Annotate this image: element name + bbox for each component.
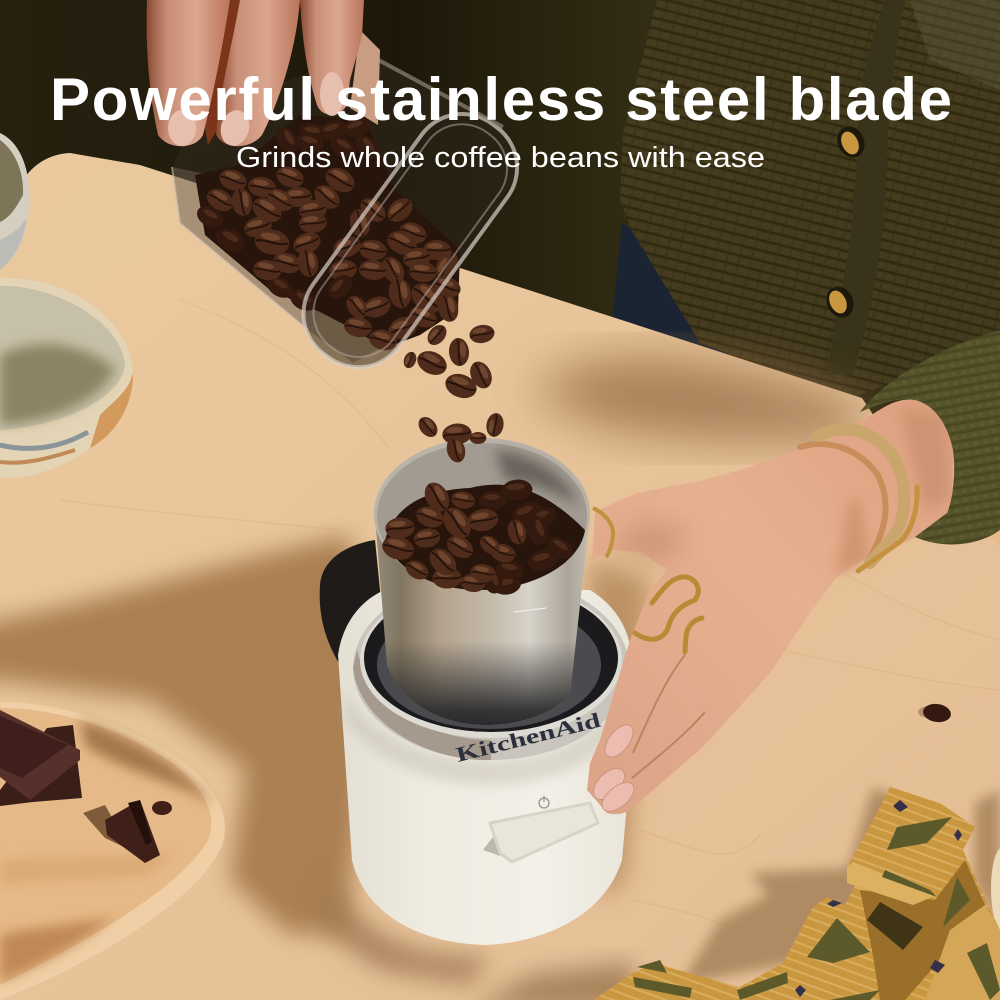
- finger nails: [588, 720, 639, 817]
- clear jar with beans: [172, 50, 537, 387]
- table shadows: [0, 357, 1000, 1000]
- finger nails: [168, 72, 344, 149]
- board shadow: [80, 720, 215, 805]
- jar bean mass: [195, 115, 460, 348]
- hand shading: [610, 520, 690, 565]
- jar beans: [193, 113, 464, 353]
- inner grinder well: [364, 584, 618, 732]
- coffee bean on table: [918, 702, 952, 724]
- cream object at right edge: [991, 848, 1000, 932]
- cloth main: [593, 787, 1000, 1000]
- patterned yellow cloth: [593, 787, 1000, 1000]
- cloth small diamonds: [795, 800, 962, 997]
- switch: [483, 803, 598, 862]
- cup measure mark: [514, 608, 546, 612]
- knitted cardigan: [620, 0, 1000, 398]
- jar side over table: [172, 167, 335, 330]
- finger dividers: [632, 655, 705, 778]
- bowl: upper left: [0, 133, 29, 270]
- palm behind jar: [350, 30, 380, 125]
- silver collar: [353, 576, 629, 760]
- beans in cup: [379, 478, 585, 597]
- gap between fingers: [200, 0, 245, 145]
- cloth folds shaded: [860, 860, 985, 1000]
- finger three: [300, 0, 364, 115]
- grinder: [320, 540, 631, 945]
- jar rim: [284, 94, 537, 387]
- wavy gold ring: [635, 577, 702, 652]
- upper hand holding jar: [147, 0, 380, 149]
- table wood grain: [60, 300, 1000, 960]
- steel cup: [374, 438, 590, 725]
- dark background behind table: [0, 0, 1000, 420]
- headline: Powerful stainless steel blade: [50, 66, 952, 133]
- cardigan top right highlight: [910, 0, 1000, 90]
- jar opening: [284, 94, 537, 387]
- board surface: [0, 708, 211, 985]
- jar body: [172, 50, 517, 363]
- bowl: left marbled: [0, 278, 133, 478]
- cloth dark patch: [867, 902, 923, 950]
- cardigan buttons: [821, 122, 870, 322]
- cup rim: [374, 438, 590, 590]
- thumb ring: [593, 508, 613, 557]
- chocolate pieces: [0, 710, 172, 863]
- cutting board: [0, 702, 225, 1000]
- gold bracelets: [800, 429, 917, 571]
- cloth flap: [847, 862, 937, 905]
- falling coffee beans: [401, 321, 505, 465]
- grinder handle: [320, 540, 385, 665]
- subheading: Grinds whole coffee beans with ease: [236, 142, 765, 174]
- finger two: [216, 0, 300, 146]
- green knit sleeve: [860, 330, 1000, 544]
- right hand on grinder: [587, 399, 954, 817]
- jeans: [612, 222, 730, 360]
- grinder white base: [338, 590, 631, 945]
- finger one: [147, 0, 230, 146]
- jar top edge: [360, 50, 503, 127]
- power icon: [539, 796, 549, 808]
- cloth green patches: [633, 817, 1000, 1000]
- jar lower edge: [172, 167, 308, 330]
- board rim: [0, 702, 225, 1000]
- brand label: KitchenAid: [453, 708, 603, 767]
- board dark grain: [0, 915, 115, 982]
- cup body: [375, 515, 590, 725]
- arm and back of hand: [587, 399, 954, 814]
